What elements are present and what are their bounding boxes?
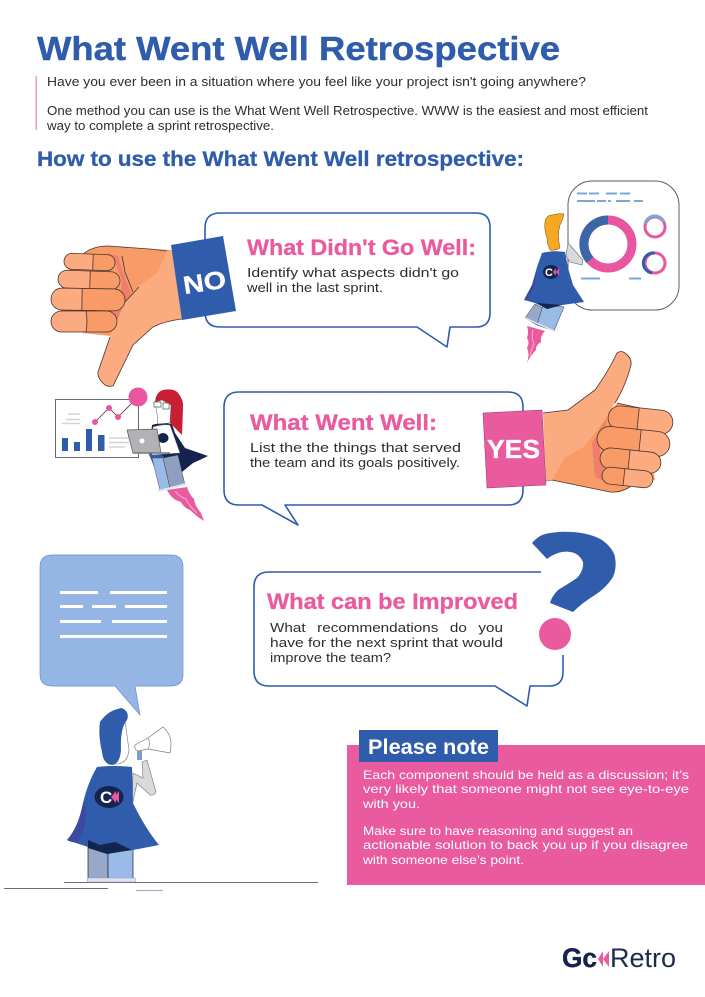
illustration: hero with laptop and bar chart: [56, 388, 208, 521]
megaphone: [135, 727, 171, 753]
cape back: [147, 440, 193, 485]
speech bubble outline: [224, 392, 523, 525]
finger 2: [596, 425, 671, 458]
line chart: [92, 388, 148, 425]
hair: [155, 389, 183, 435]
laptop: [127, 429, 161, 453]
finger 1: [607, 405, 674, 435]
body text: [246, 266, 459, 295]
icon: YES cuff: YES: [487, 434, 540, 464]
body text: the team and its goals positively.: [250, 456, 460, 470]
glasses: [154, 402, 169, 409]
torso: [152, 425, 180, 455]
icon: NO cuff: NO: [181, 266, 228, 300]
cape logo: C: [545, 267, 553, 279]
face edge: [108, 720, 129, 764]
callout body: very likely that someone might not see eye-to-eye: [363, 782, 689, 796]
icon: thumbs down hand: [51, 246, 182, 386]
callout heading: [359, 730, 498, 762]
chart board: [56, 400, 138, 458]
chart board: [568, 181, 679, 310]
finger 3: [51, 288, 125, 311]
speech bubble: blank message: [40, 555, 183, 715]
text dashes: [577, 194, 643, 278]
cape: [524, 251, 584, 309]
finger 2: [58, 270, 120, 290]
intro text block: [36, 75, 649, 133]
icon: NO cuff: [171, 236, 236, 320]
neck: [552, 235, 566, 252]
speech bubble outline: [254, 572, 563, 706]
callout body: [362, 768, 689, 867]
body text: well in the last sprint.: [246, 281, 383, 295]
heading: what can be improved: What can be Improved: [267, 589, 518, 614]
intro text block: One method you can use is the What Went Well Retrospective. WWW is the easiest and most efficient: [47, 104, 649, 118]
body text: [270, 621, 503, 665]
illustration: hero with megaphone: [4, 708, 318, 890]
panel: what didn't go well: [205, 213, 490, 347]
finger 1: [64, 253, 115, 271]
hair: [99, 708, 128, 765]
small ring charts: [643, 216, 665, 273]
flame: [167, 487, 204, 521]
heading: what didn't go well: What Didn't Go Well:: [247, 235, 476, 260]
callout: please note: [347, 730, 705, 885]
finger 3: [599, 447, 662, 474]
grey text lines: [62, 414, 131, 447]
shirt logo: [158, 433, 168, 443]
callout body: with someone else’s point.: [362, 853, 524, 867]
icon: question mark: [532, 532, 616, 650]
arm: [132, 760, 156, 806]
intro text block: Have you ever been in a situation where you feel like your project isn't going anywhere?: [47, 75, 586, 89]
illustration: hero with donut chart: [524, 181, 679, 363]
icon: YES cuff: [483, 410, 546, 488]
callout heading: Please note: [368, 736, 489, 759]
body text: [250, 441, 461, 470]
body text: List the the things that served: [250, 441, 461, 455]
body text: improve the team?: [270, 651, 391, 665]
speech bubble outline: [205, 213, 490, 347]
cape logo: [94, 786, 124, 808]
callout body: actionable solution to back you up if you disagree: [363, 838, 688, 852]
logo: GoRetro: [562, 943, 676, 973]
icon: thumbs up hand: [543, 352, 674, 492]
body text: What recommendations do you: [270, 621, 503, 635]
section heading: How to use the What Went Well retrospective:: [37, 148, 524, 171]
hair: [545, 214, 564, 250]
callout body: with you.: [362, 797, 420, 811]
arm: [566, 243, 583, 265]
logo: GoRetro: Gc: [562, 943, 597, 973]
legs: [88, 845, 108, 880]
intro text block: way to complete a sprint retrospective.: [46, 119, 274, 133]
legs: [525, 304, 543, 325]
callout body: Each component should be held as a discussion; it’s: [363, 768, 689, 782]
ground lines: [4, 882, 318, 888]
body text: Identify what aspects didn't go: [247, 266, 459, 280]
legs: [152, 458, 170, 490]
cape logo: C: [100, 788, 112, 807]
logo: GoRetro: Retro: [610, 943, 676, 973]
bar chart: [62, 429, 104, 451]
panel: what can be improved: [254, 572, 563, 706]
heading: what went well: What Went Well:: [250, 410, 437, 435]
body text: have for the next sprint that would: [270, 636, 503, 650]
panel: what went well: [224, 392, 523, 525]
face: [155, 400, 171, 424]
flame: [527, 326, 545, 363]
cape: [67, 766, 159, 853]
cape logo: [543, 265, 559, 279]
cape: [150, 423, 208, 472]
title: What Went Well Retrospective: [37, 30, 560, 67]
finger 4: [601, 466, 654, 489]
callout body: Make sure to have reasoning and suggest an: [363, 824, 633, 838]
donut chart: [584, 220, 632, 268]
finger 4: [51, 311, 117, 332]
